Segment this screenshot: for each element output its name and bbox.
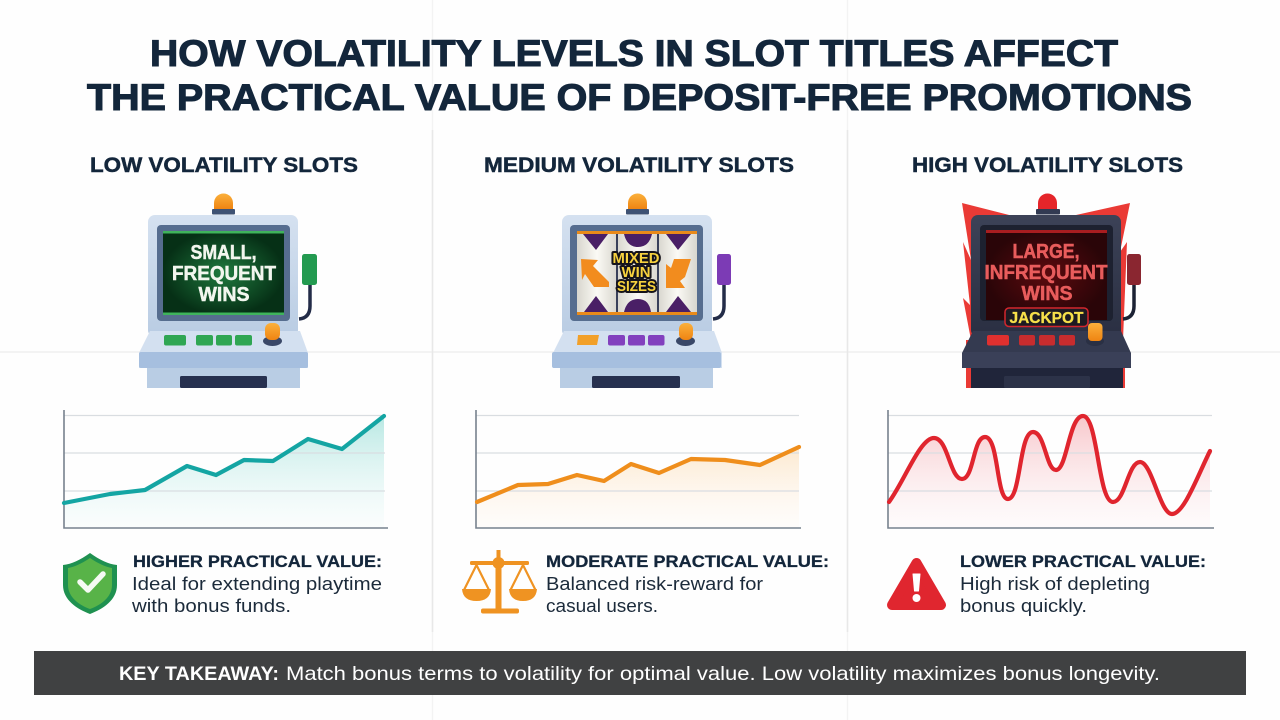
title	[87, 33, 1192, 118]
slot machine: low volatility: WINS	[198, 284, 250, 306]
text: higher practical value: Ideal for extending playtime	[132, 574, 382, 594]
title: THE PRACTICAL VALUE OF DEPOSIT-FREE PROMOTIONS	[87, 77, 1192, 118]
banner: key takeaway	[34, 651, 1246, 695]
slot machine: high volatility: JACKPOT	[1010, 310, 1084, 327]
slot machine: low volatility: FREQUENT	[172, 263, 276, 285]
icon: red warning triangle	[892, 563, 941, 605]
icon: green shield with check	[63, 553, 117, 614]
text: lower practical value: LOWER PRACTICAL VALUE:	[960, 553, 1206, 571]
line chart: high volatility swings	[888, 410, 1214, 528]
banner: key takeaway: KEY TAKEAWAY:	[119, 663, 279, 685]
slot machine: high volatility: LARGE,	[1012, 241, 1080, 263]
text: moderate practical value: Balanced risk-reward for	[546, 574, 763, 594]
text: moderate practical value: MODERATE PRACTICAL VALUE:	[546, 553, 829, 571]
line chart: low volatility steady growth	[64, 410, 388, 528]
slot machine: medium volatility: WIN	[622, 265, 650, 281]
heading: medium volatility slots: MEDIUM VOLATILITY SLOTS	[484, 153, 794, 177]
text: moderate practical value: casual users.	[546, 596, 658, 616]
slot machine: medium volatility	[552, 194, 731, 388]
text: lower practical value: bonus quickly.	[960, 596, 1087, 616]
text: higher practical value: HIGHER PRACTICAL VALUE:	[133, 553, 382, 571]
text: lower practical value	[960, 553, 1206, 616]
line chart: medium volatility moderate growth	[476, 410, 801, 528]
slot machine: high volatility	[962, 194, 1141, 388]
slot machine: high volatility: INFREQUENT	[984, 262, 1108, 284]
title: HOW VOLATILITY LEVELS IN SLOT TITLES AFFECT	[150, 33, 1118, 74]
text: lower practical value: High risk of depleting	[960, 574, 1150, 594]
slot machine: high volatility: WINS	[1022, 283, 1072, 305]
text: moderate practical value	[546, 553, 829, 616]
panel: low volatility	[63, 153, 388, 616]
panel: high volatility	[888, 153, 1214, 616]
banner: key takeaway: Match bonus terms to volatility for optimal value. Low volatility maximizes bonus longevity.	[286, 663, 1160, 685]
slot machine: medium volatility: MIXED	[612, 251, 660, 267]
heading: low volatility slots: LOW VOLATILITY SLOTS	[90, 153, 358, 177]
slot machine: low volatility: SMALL,	[190, 242, 256, 264]
icon: orange balance scale	[462, 550, 537, 614]
slot machine: medium volatility: SIZES	[617, 279, 656, 295]
heading: high volatility slots: HIGH VOLATILITY SLOTS	[912, 153, 1183, 177]
slot machine: low volatility	[139, 194, 317, 388]
text: higher practical value: with bonus funds.	[131, 596, 291, 616]
text: higher practical value	[131, 553, 382, 616]
panel: medium volatility	[462, 153, 829, 616]
